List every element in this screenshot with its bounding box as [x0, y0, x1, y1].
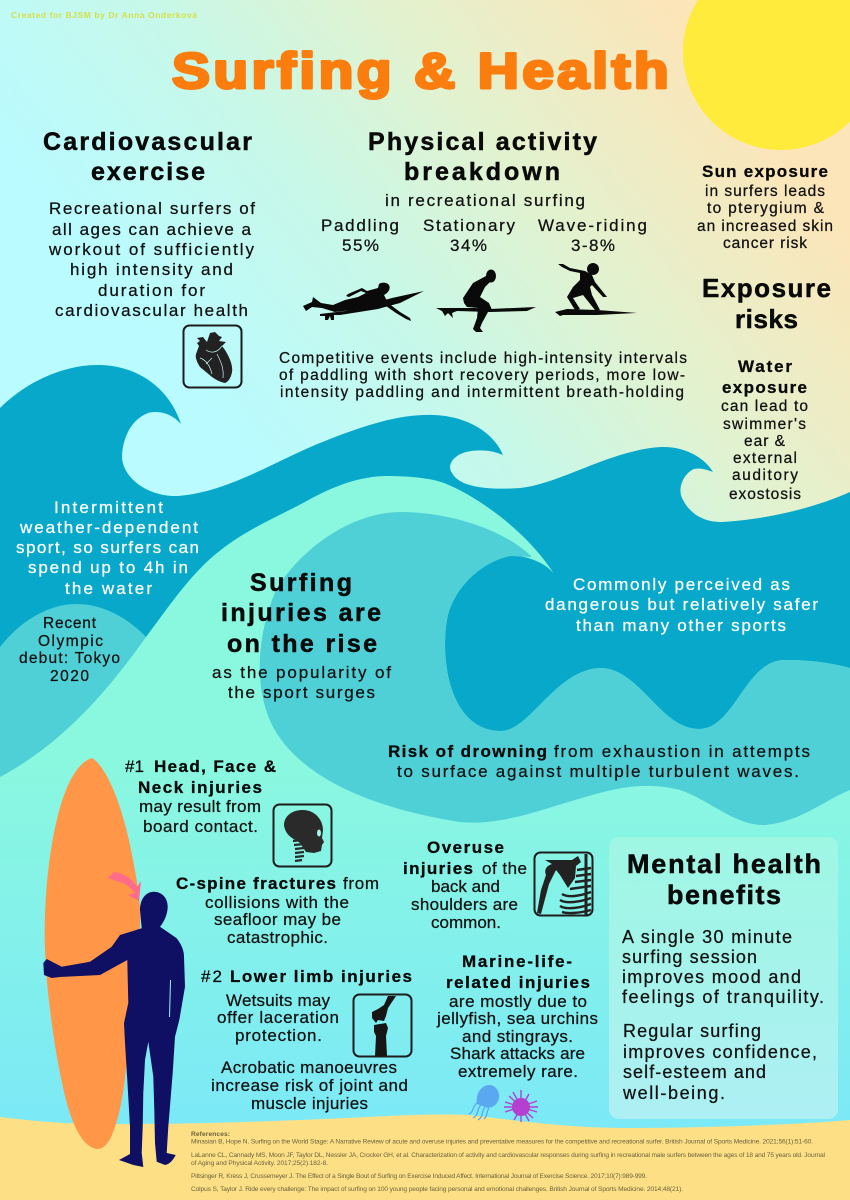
text: competitive events	[279, 350, 687, 401]
text: marine-life injuries: are mostly due to	[449, 992, 587, 1011]
text: competitive events: of paddling with short recovery periods, more low-	[279, 367, 685, 384]
icon: knee	[354, 994, 412, 1056]
stat: wave-riding: Wave-riding	[538, 216, 647, 235]
panel: sun exposure	[697, 162, 833, 252]
text: overuse injuries: back and	[431, 877, 500, 896]
text: regular surfing: Regular surfing	[623, 1021, 761, 1041]
panel: lower limb injuries: Wetsuits may	[226, 991, 330, 1010]
panel: sun exposure: in surfers leads	[705, 183, 825, 200]
panel: lower limb injuries: muscle injuries	[251, 1094, 368, 1113]
heading: mental health	[627, 849, 821, 910]
surfer figure	[43, 892, 185, 1167]
back wave	[0, 365, 850, 1200]
text: olympic debut	[19, 615, 120, 685]
stat: wave-riding: 3-8%	[571, 236, 615, 255]
stat: stationary: 34%	[450, 236, 487, 255]
sun	[683, 0, 850, 150]
text: water exposure: Water	[738, 357, 792, 376]
panel: head face neck injuries: may result from	[139, 797, 261, 816]
panel: head face neck injuries: board contact.	[143, 817, 258, 836]
surfboard	[45, 758, 140, 1149]
heading: surfing injuries: Surfing	[250, 569, 352, 597]
text: perceived as dangerous: than many other sports	[576, 616, 786, 635]
small olympic wave	[0, 604, 146, 800]
heading: cardiovascular	[43, 128, 252, 186]
text: risk of drowning: Risk of drowning	[388, 742, 547, 761]
text: weather-dependent sport: sport, so surfers can	[16, 538, 199, 557]
text: overuse injuries: common.	[431, 913, 501, 932]
text: single session: feelings of tranquility.	[622, 987, 824, 1007]
text: water exposure: can lead to	[721, 398, 808, 415]
text: overuse injuries	[403, 838, 527, 932]
heading: mental health: Mental health	[627, 849, 821, 879]
text: weather-dependent sport: spend up to 4h in	[28, 558, 188, 577]
text: perceived as dangerous	[545, 575, 818, 635]
sand	[0, 1115, 850, 1200]
text: weather-dependent sport: weather-dependent	[19, 518, 198, 537]
text: c-spine fractures: collisions with the	[205, 893, 349, 912]
panel: head face neck injuries	[125, 757, 276, 836]
title: Surfing & Health	[172, 43, 672, 99]
credit line: Created for BJSM by Dr Anna Onderková	[11, 10, 197, 20]
text: olympic debut: debut: Tokyo	[19, 650, 120, 667]
panel: head face neck injuries: #1	[125, 757, 144, 776]
panel: head face neck injuries: Head, Face &	[154, 757, 276, 776]
text: water exposure: exostosis	[729, 486, 801, 503]
text: regular surfing: improves confidence,	[623, 1042, 817, 1062]
text: regular surfing: self-esteem and	[623, 1062, 766, 1082]
text: c-spine fractures	[176, 874, 379, 947]
panel: lower limb injuries	[201, 967, 412, 1113]
text: single session	[622, 927, 824, 1007]
icon: heart	[184, 326, 242, 388]
text: single session: A single 30 minute	[622, 927, 792, 947]
text: marine-life injuries	[436, 952, 598, 1081]
heading: cardiovascular: Cardiovascular	[43, 128, 252, 156]
panel: sun exposure: an increased skin	[697, 218, 833, 235]
text: cardiovascular body: duration for	[98, 281, 205, 300]
text: competitive events: Competitive events include high-intensity intervals	[279, 350, 687, 367]
panel: lower limb injuries: Lower limb injuries	[230, 967, 412, 986]
stat: stationary	[423, 216, 516, 255]
text: overuse injuries: injuries	[403, 859, 473, 878]
panel: sun exposure: to pterygium &	[707, 200, 825, 217]
text: cardiovascular body: Recreational surfers of	[49, 199, 255, 218]
panel: lower limb injuries: #2	[201, 967, 222, 986]
panel: physical activity breakdown	[279, 128, 687, 401]
text: cardiovascular body: cardiovascular health	[55, 301, 248, 320]
stat: paddling	[321, 216, 399, 255]
text: weather-dependent sport	[16, 498, 199, 598]
text: risk of drowning: to surface against multiple turbulent waves.	[397, 762, 799, 781]
text: overuse injuries: shoulders are	[411, 895, 518, 914]
heading: surfing injuries: injuries are	[221, 599, 381, 627]
references: References:	[191, 1131, 230, 1138]
text: competitive events: intensity paddling and intermittent breath-holding	[280, 384, 684, 401]
text: c-spine fractures: catastrophic.	[227, 928, 328, 947]
panel: lower limb injuries: protection.	[235, 1026, 322, 1045]
panel: head face neck injuries: Neck injuries	[138, 778, 262, 797]
stat: paddling: Paddling	[321, 216, 399, 235]
text: cardiovascular body: all ages can achieve a	[52, 220, 252, 239]
heading: surfing injuries: the sport surges	[228, 683, 375, 702]
text: cardiovascular body: high intensity and	[70, 260, 233, 279]
text: perceived as dangerous: Commonly perceived as	[573, 575, 790, 594]
text: in recreational surfing: in recreational surfing	[385, 191, 585, 210]
heading: mental health: benefits	[667, 880, 781, 910]
heading: physical activity: Physical activity	[368, 128, 597, 156]
text: overuse injuries: Overuse	[427, 838, 504, 857]
heading: exposure risks: Exposure	[702, 273, 831, 303]
panel: cardiovascular exercise	[43, 128, 255, 388]
text: single session: surfing session	[622, 947, 757, 967]
stat: paddling: 55%	[342, 236, 379, 255]
text: marine-life injuries: jellyfish, sea urchins	[436, 1009, 598, 1028]
panel: sun exposure: cancer risk	[723, 235, 807, 252]
stat: stationary: Stationary	[423, 216, 516, 235]
text: weather-dependent sport: the water	[65, 579, 152, 598]
references	[191, 1131, 826, 1193]
panel: mental health benefits	[609, 837, 838, 1119]
icon: stationary surfer	[436, 270, 536, 332]
heading: surfing injuries	[212, 569, 391, 702]
text: cardiovascular body	[48, 199, 255, 320]
text: cardiovascular body: workout of sufficiently	[48, 240, 254, 259]
text: regular surfing	[622, 1021, 817, 1103]
text: marine-life injuries: related injuries	[446, 973, 590, 992]
panel: lower limb injuries: offer laceration	[217, 1008, 339, 1027]
text: water exposure: ear &	[744, 433, 786, 450]
text: single session: improves mood and	[622, 967, 801, 987]
references: Pittsinger R, Kress J, Crussemeyer J. The Effect of a Single Bout of Surfing on Exercise Induced Affect. International Journal of Exercise Science. 2017;10(7):989-999.	[191, 1173, 647, 1180]
icon: skull	[274, 804, 332, 866]
text: c-spine fractures: from	[343, 874, 379, 893]
heading: surfing injuries: as the popularity of	[212, 663, 391, 682]
stat: wave-riding	[538, 216, 647, 255]
heading: exposure risks: risks	[735, 304, 798, 334]
large mint wave	[0, 476, 850, 1200]
heading: cardiovascular: exercise	[91, 158, 205, 186]
references: of Aging and Physical Activity. 2017;25(2):182-8.	[191, 1160, 328, 1167]
text: water exposure: swimmer's	[723, 416, 806, 433]
references: Colpus S, Taylor J. Ride every challenge: The impact of surfing on 100 young people facing personal and emotional challenges. British Journal of Sports Medicine. 2014;48(21).	[191, 1186, 683, 1193]
icon: paddling surfer	[303, 283, 424, 321]
references: Minasian B, Hope N. Surfing on the World Stage: A Narrative Review of acute and overuse injuries and preventative measures for the competitive and recreational surfer. British Journal of Sports Medicine. 2021;56(1):51-60.	[191, 1138, 813, 1146]
pink arrow	[108, 872, 141, 901]
text: marine-life injuries: Marine-life-	[462, 952, 572, 971]
icon: wave-riding surfer	[555, 263, 637, 316]
text: marine-life injuries: and stingrays.	[462, 1027, 573, 1046]
text: water exposure	[721, 357, 808, 503]
text: risk of drowning	[388, 742, 810, 781]
heading: surfing injuries: on the rise	[227, 630, 377, 658]
text: overuse injuries: of the	[482, 859, 527, 878]
text: olympic debut: Recent	[43, 615, 97, 632]
references: LaLanne CL, Cannady MS, Moon JF, Taylor DL, Nessler JA, Crocker GH, et al. Characterization of activity and cardiovascular responses during surfing in recreational male surfers between the ages of 18 and 75 years old. Journal	[191, 1152, 826, 1159]
inner teal wave	[260, 512, 850, 825]
text: risk of drowning: from exhaustion in attempts	[554, 742, 810, 761]
text: c-spine fractures: seafloor may be	[214, 910, 341, 929]
heading: exposure risks	[702, 273, 831, 334]
heading: physical activity	[368, 128, 597, 186]
text: water exposure: external	[733, 450, 797, 467]
text: marine-life injuries: Shark attacks are	[450, 1044, 585, 1063]
text: water exposure: auditory	[732, 467, 798, 484]
text: weather-dependent sport: Intermittent	[54, 498, 163, 517]
text: water exposure: exposure	[722, 378, 807, 397]
text: c-spine fractures: C-spine fractures	[176, 874, 336, 893]
text: perceived as dangerous: dangerous but relatively safer	[545, 595, 818, 614]
panel: lower limb injuries: Acrobatic manoeuvres	[221, 1058, 397, 1077]
panel: sun exposure: Sun exposure	[702, 162, 828, 181]
text: regular surfing: well-being.	[622, 1083, 725, 1103]
icon: jellyfish	[469, 1085, 499, 1120]
text: olympic debut: Olympic	[38, 633, 103, 650]
text: marine-life injuries: extremely rare.	[458, 1062, 578, 1081]
heading: physical activity: breakdown	[404, 158, 560, 186]
text: olympic debut: 2020	[50, 668, 89, 685]
panel: lower limb injuries: increase risk of joint and	[211, 1076, 408, 1095]
icon: shoulder skeleton	[534, 852, 592, 916]
icon: sea urchin	[504, 1090, 538, 1122]
